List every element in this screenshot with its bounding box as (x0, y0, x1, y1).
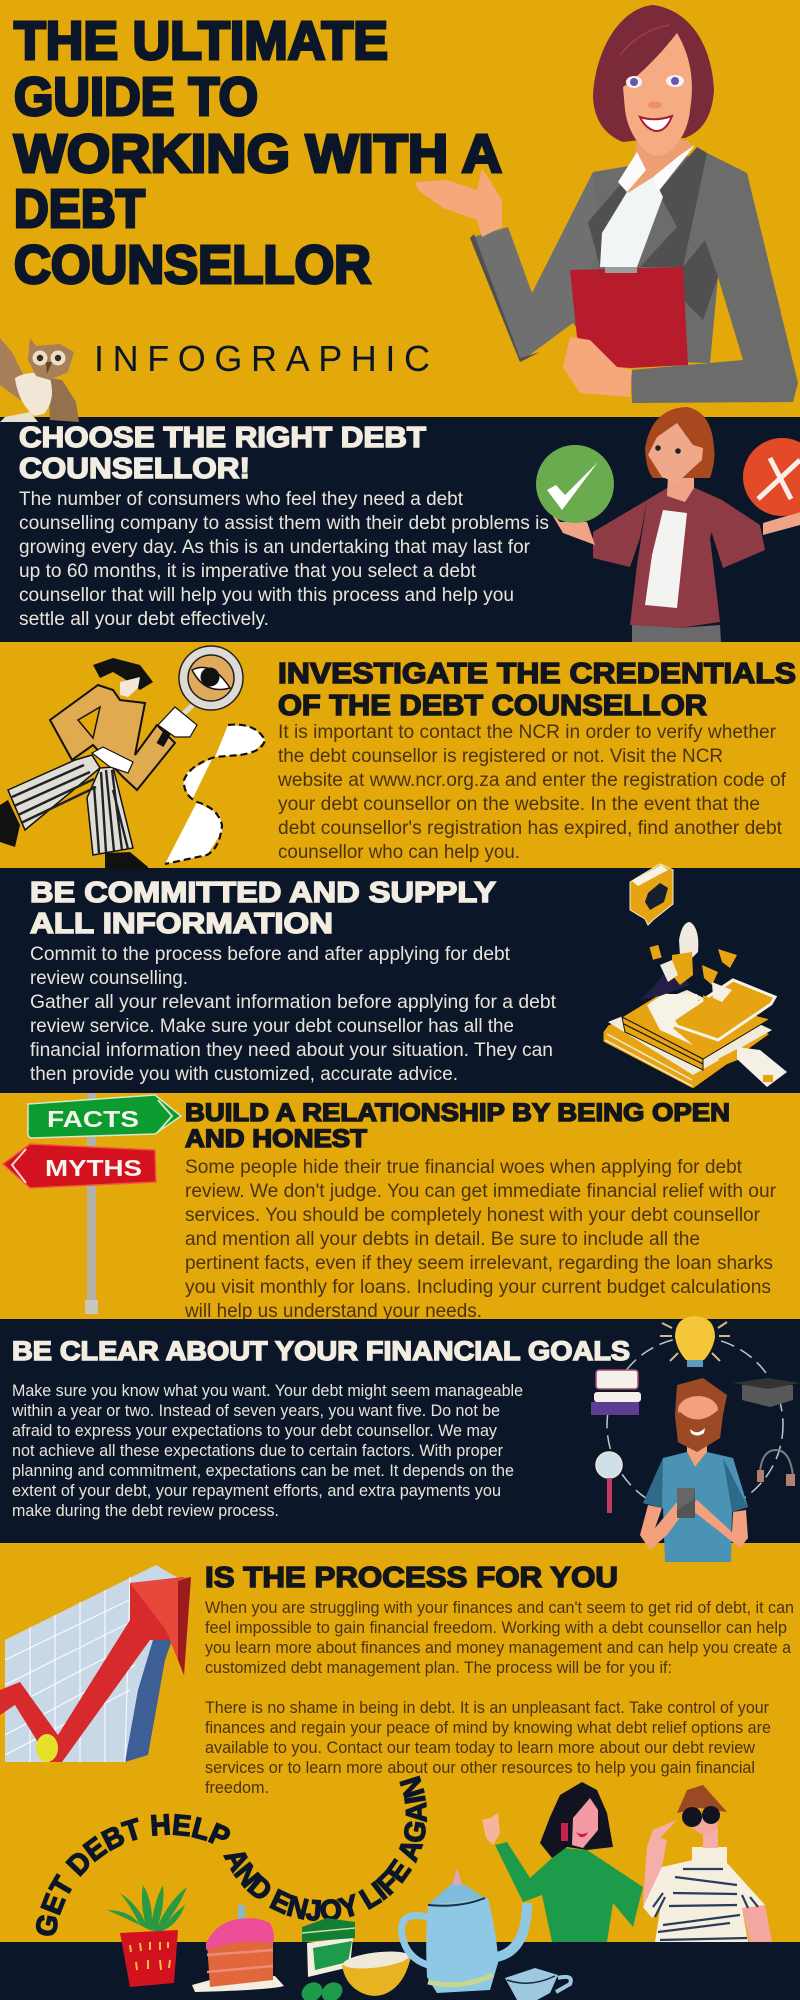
text block: planning and commitment, expectations can be met. It depends on the (12, 1462, 514, 1480)
heading: CHOOSE THE RIGHT DEBT (19, 422, 426, 454)
text block: services. You should be completely honest with your debt counsellor (185, 1205, 761, 1226)
text block: Gather all your relevant information before applying for a debt (30, 992, 557, 1013)
text block: growing every day. As this is an undertaking that may last for (19, 537, 531, 558)
illustration: woman weighing right and wrong (536, 407, 800, 642)
figure: man (640, 1378, 748, 1562)
text block: settle all your debt effectively. (19, 609, 269, 630)
text block: Commit to the process before and after applying for debt (30, 944, 511, 965)
text block: website at www.ncr.org.za and enter the registration code of (277, 770, 787, 791)
text block: counselling company to assist them with their debt problems is (19, 513, 549, 534)
dashed footprints (165, 725, 265, 864)
cup (505, 1968, 571, 2000)
text block: extent of your debt, your repayment efforts, and extra payments you (12, 1482, 501, 1500)
heading (278, 658, 796, 722)
text block: will help us understand your needs. (184, 1301, 482, 1322)
panel: choose the right debt counsellor (0, 407, 800, 642)
panel: be clear about your financial goals (0, 1319, 800, 1543)
title (14, 11, 502, 295)
curved text: and enjoy life again: AND ENJOY LIFE AGAIN (222, 1776, 428, 1922)
heading: OF THE DEBT COUNSELLOR (278, 690, 707, 722)
icon: red cross (743, 438, 800, 516)
cake (192, 1905, 284, 1992)
text block: within a year or two. Instead of seven years, you want five. Do not be (11, 1402, 500, 1420)
text block (277, 722, 787, 863)
heading: BUILD A RELATIONSHIP BY BEING OPEN (185, 1099, 730, 1127)
illustration: friends at table (107, 1782, 772, 2000)
heading: INVESTIGATE THE CREDENTIALS (278, 658, 796, 690)
text block: services or to learn more about our other resources to help you gain financial (205, 1759, 755, 1777)
illustration: isometric books and phone (603, 864, 787, 1089)
text block: financial information they need about your situation. They can (30, 1040, 553, 1061)
curved text: get debt help: GET DEBT HELP (36, 1814, 230, 1936)
heading (185, 1099, 730, 1153)
illustration: rising chart with red arrow (0, 1565, 191, 1762)
icon: speech bubble with star (630, 864, 673, 925)
figure: woman in green (482, 1782, 643, 1942)
icon: magnifying glass (596, 1452, 622, 1513)
icon: light bulb (660, 1316, 730, 1367)
panel: investigate the credentials (0, 642, 800, 870)
text block: The number of consumers who feel they need a debt (19, 489, 464, 510)
sign: myths: MYTHS (45, 1155, 142, 1181)
cucumbers (298, 1978, 346, 2000)
icon: owl mascot (0, 338, 79, 422)
heading: ALL INFORMATION (30, 908, 333, 940)
text block: you learn more about finances and money management and can help you create a (205, 1639, 792, 1657)
icon: graduation cap (733, 1378, 800, 1407)
text block: freedom. (205, 1779, 269, 1797)
figure: woman in stripes (643, 1785, 772, 1942)
title: THE ULTIMATE (14, 11, 388, 71)
text block: make during the debt review process. (12, 1502, 279, 1520)
icon: headphones (757, 1450, 795, 1486)
jar (302, 1918, 355, 1977)
text block: and mention all your debts in detail. Be sure to include all the (185, 1229, 700, 1250)
heading: IS THE PROCESS FOR YOU (205, 1562, 618, 1594)
heading: AND HONEST (185, 1125, 367, 1153)
text block: finances and regain your peace of mind by knowing what debt relief options are (205, 1719, 771, 1737)
text block: customized debt management plan. The process will be for you if: (205, 1659, 672, 1677)
text block (30, 944, 557, 1085)
panel: build a relationship (0, 1093, 800, 1322)
illustration: woman with magnifier (0, 646, 265, 870)
text block (19, 489, 549, 630)
illustration: man with ideas circle (591, 1316, 800, 1562)
text block: counsellor who can help you. (278, 842, 520, 863)
icon: green check (536, 445, 614, 523)
text block: When you are struggling with your finances and can't seem to get rid of debt, it can (205, 1599, 794, 1617)
text block: review. We don't judge. You can get immediate financial relief with our (185, 1181, 777, 1202)
panel: hero header (0, 0, 800, 422)
text block: up to 60 months, it is imperative that you select a debt (19, 561, 477, 582)
text block: your debt counsellor on the website. In the event that the (278, 794, 760, 815)
sign: myths (3, 1144, 156, 1188)
title: GUIDE TO (14, 67, 258, 127)
subtitle: infographic: INFOGRAPHIC (94, 338, 430, 379)
sign: facts (28, 1095, 181, 1138)
panel: be committed and supply all information (0, 864, 800, 1093)
icon: stack of books (591, 1370, 641, 1415)
text block: then provide you with customized, accurate advice. (30, 1064, 458, 1085)
heading: BE CLEAR ABOUT YOUR FINANCIAL GOALS (12, 1336, 630, 1366)
text block: There is no shame in being in debt. It is an unpleasant fact. Take control of your (205, 1699, 769, 1717)
heading: BE COMMITTED AND SUPPLY (30, 877, 496, 909)
text block: counsellor that will help you with this process and help you (19, 585, 514, 606)
heading: COUNSELLOR! (19, 453, 250, 485)
text block: feel impossible to gain financial freedom. Working with a debt counsellor can help (205, 1619, 787, 1637)
text block: review counselling. (30, 968, 188, 989)
heading (19, 422, 426, 485)
heading (30, 877, 496, 940)
text block: afraid to express your expectations to your debt counsellor. We may (12, 1422, 498, 1440)
text block: not achieve all these expectations due to certain factors. With proper (12, 1442, 503, 1460)
title: WORKING WITH A (14, 124, 502, 184)
illustration: businesswoman with clipboard (415, 5, 798, 403)
title: COUNSELLOR (14, 235, 371, 295)
panel: is the process for you (0, 1543, 800, 1942)
teapot (402, 1868, 527, 1993)
text block (205, 1599, 794, 1797)
sign: facts: FACTS (47, 1106, 139, 1132)
illustration: facts and myths signpost (3, 1093, 181, 1314)
text block: available to you. Contact our team today to learn more about our debt review (205, 1739, 755, 1757)
title: DEBT (14, 179, 145, 239)
text block: debt counsellor's registration has expired, find another debt (278, 818, 783, 839)
text block: review service. Make sure your debt counsellor has all the (30, 1016, 514, 1037)
text block (11, 1382, 523, 1520)
text block (184, 1157, 777, 1322)
bowl (342, 1949, 411, 1996)
text block: pertinent facts, even if they seem irrelevant, regarding the loan sharks (185, 1253, 773, 1274)
text block: the debt counsellor is registered or not. Visit the NCR (278, 746, 723, 767)
text block: It is important to contact the NCR in order to verify whether (278, 722, 777, 743)
text block: Make sure you know what you want. Your debt might seem manageable (12, 1382, 523, 1400)
text block: Some people hide their true financial woes when applying for debt (185, 1157, 743, 1178)
text block: you visit monthly for loans. Including your current budget calculations (185, 1277, 771, 1298)
icon: magnifier (158, 646, 243, 745)
plant (107, 1885, 187, 1987)
